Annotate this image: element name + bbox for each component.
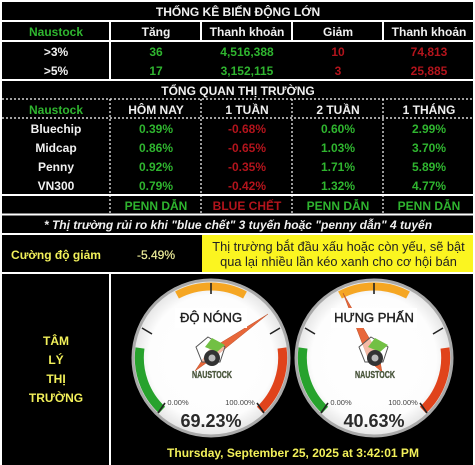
row: Bluechip: 0.60% <box>321 122 355 136</box>
needle <box>343 293 382 372</box>
market sentiment label: THỊ <box>46 372 66 386</box>
gauge title: ĐỘ NÓNG <box>180 310 242 325</box>
panel: market overview <box>29 83 460 213</box>
needle <box>195 314 268 371</box>
row: Penny: Penny <box>38 160 74 174</box>
row: leadership status: PENN DẪN <box>125 198 187 213</box>
overview header row: 2 TUẦN <box>316 102 360 117</box>
logo: NAUSTOCK <box>192 370 233 381</box>
market sentiment label: LÝ <box>48 352 64 367</box>
market sentiment label: TÂM <box>43 333 69 348</box>
row: VN300: 0.79% <box>139 179 173 193</box>
table header row: Giảm <box>323 25 353 39</box>
market sentiment label <box>29 333 83 405</box>
scale labels: 0.00% <box>330 398 352 407</box>
decline intensity: Cường độ giảm <box>11 248 101 262</box>
row: above 5 percent: 3,152,115 <box>221 64 274 78</box>
row: above 5 percent: 25,885 <box>411 64 448 78</box>
row: VN300 <box>38 179 446 193</box>
callout: market warning <box>202 235 473 272</box>
row: VN300: -0.42% <box>228 179 266 193</box>
row: Bluechip <box>31 122 446 136</box>
row: VN300: 1.32% <box>321 179 355 193</box>
row: Penny: 1.71% <box>321 160 355 174</box>
overview header row: Naustock <box>29 103 83 117</box>
row: leadership status: PENN DẪN <box>398 198 460 213</box>
gauge: excitement <box>296 280 452 436</box>
row: above 5 percent: >5% <box>44 64 69 78</box>
row: Penny: 0.92% <box>139 160 173 174</box>
gauge: heat <box>133 280 289 436</box>
row: Penny: -0.35% <box>228 160 266 174</box>
logo: NAUSTOCK <box>355 370 396 381</box>
row: leadership status: PENN DẪN <box>307 198 369 213</box>
row: VN300: 4.77% <box>412 179 446 193</box>
overview header row: 1 THÁNG <box>403 102 455 117</box>
scale labels: 0.00% <box>167 398 189 407</box>
heading: market overview: TỔNG QUAN THỊ TRƯỜNG <box>161 83 315 98</box>
gauge value: 69.23% <box>180 411 242 431</box>
row: VN300: VN300 <box>38 179 75 193</box>
overview header row <box>29 102 455 117</box>
logo <box>192 337 233 381</box>
row: Bluechip: 0.39% <box>139 122 173 136</box>
row: above 3 percent: 4,516,388 <box>220 45 274 59</box>
scale labels <box>330 398 418 407</box>
risk note: * Thị trường rủi ro khi "blue chết" 3 tuyến hoặc "penny dẫn" 4 tuyến <box>44 217 432 232</box>
overview header row: HÔM NAY <box>128 102 184 117</box>
row: Bluechip: 2.99% <box>412 122 446 136</box>
gauge title <box>331 308 417 328</box>
row: above 3 percent <box>44 45 448 59</box>
decline intensity <box>11 248 175 262</box>
row: above 3 percent: 10 <box>331 45 345 59</box>
scale labels: 100.00% <box>388 398 418 407</box>
scale labels <box>167 398 255 407</box>
scale labels: 100.00% <box>225 398 255 407</box>
row: above 5 percent: 3 <box>335 64 342 78</box>
row: Midcap: 3.70% <box>412 141 446 155</box>
row: leadership status <box>125 198 460 213</box>
table header row: Tăng <box>142 25 170 39</box>
heading: large movement statistics: THỐNG KÊ BIẾN ĐỘNG LỚN <box>156 4 320 19</box>
logo <box>355 337 396 381</box>
callout: market warning: Thị trường bắt đầu xấu hoặc còn yếu, sẽ bật <box>212 239 465 254</box>
panel: large movement statistics <box>29 4 466 78</box>
row: Midcap <box>35 141 446 155</box>
row: Bluechip: -0.68% <box>228 122 266 136</box>
callout: market warning: qua lại nhiều lần kéo xanh cho cơ hội bán <box>220 254 457 269</box>
market sentiment label: TRƯỜNG <box>29 390 83 405</box>
table header row: Thanh khoản <box>392 25 466 39</box>
row: Midcap: 0.86% <box>139 141 173 155</box>
timestamp: Thursday, September 25, 2025 at 3:42:01 PM <box>167 446 419 460</box>
row: leadership status: BLUE CHẾT <box>213 198 282 213</box>
table header row: Naustock <box>29 25 83 39</box>
gauge value: 40.63% <box>343 411 405 431</box>
row: above 3 percent: 74,813 <box>411 45 448 59</box>
row: Midcap: -0.65% <box>228 141 266 155</box>
gauge title: HƯNG PHẤN <box>334 310 414 325</box>
decline intensity: -5.49% <box>137 248 175 262</box>
row: Penny <box>38 160 446 174</box>
row: Midcap: Midcap <box>35 141 77 155</box>
table header row: Thanh khoản <box>210 25 284 39</box>
table header row <box>29 25 466 39</box>
row: Midcap: 1.03% <box>321 141 355 155</box>
overview header row: 1 TUẦN <box>225 102 269 117</box>
row: above 3 percent: >3% <box>44 45 69 59</box>
row: above 5 percent <box>44 64 448 78</box>
gauge title <box>175 308 247 328</box>
row: Bluechip: Bluechip <box>31 122 81 136</box>
row: above 3 percent: 36 <box>149 45 163 59</box>
row: above 5 percent: 17 <box>149 64 163 78</box>
row: Penny: 5.89% <box>412 160 446 174</box>
